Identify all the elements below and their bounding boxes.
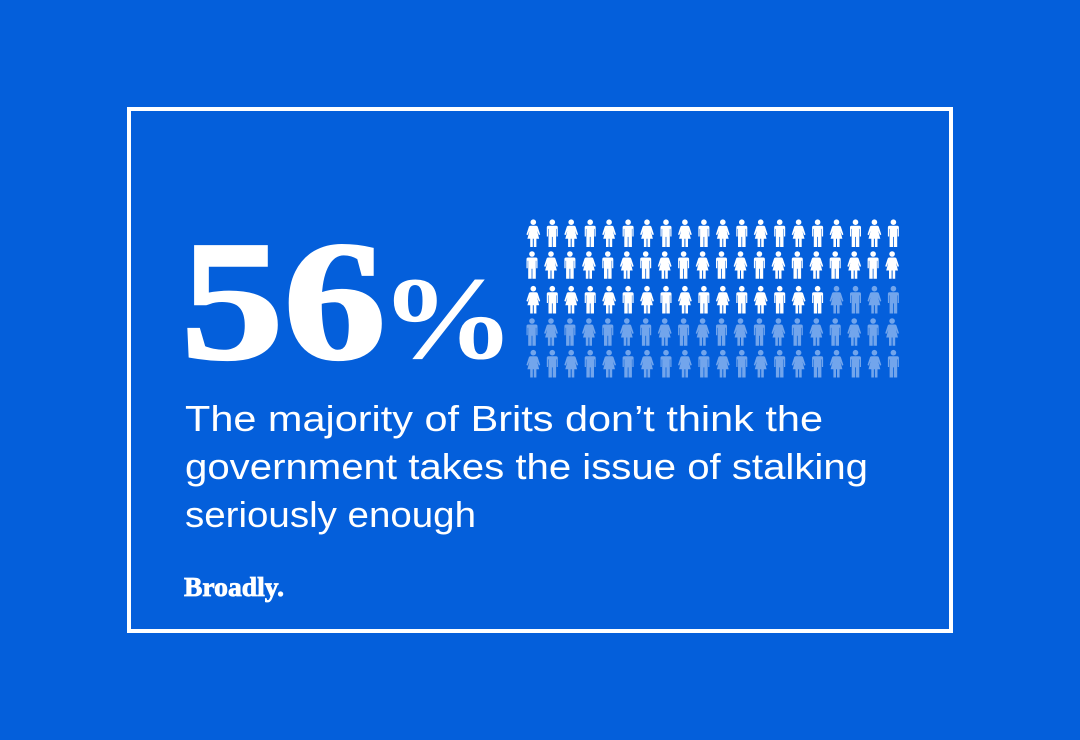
headline figure: 56%: 56 [181,207,386,395]
white frame [129,109,951,631]
pictogram: 56 of 100 people highlighted [526,219,899,378]
statement text: The majority of Brits don’t think the [185,398,823,439]
headline figure: 56% [181,207,515,395]
statement text [185,398,868,535]
statement text: government takes the issue of stalking [185,446,868,487]
row 2: 20 white figures [526,251,899,279]
row 4: 20 pale figures [526,318,899,346]
logo: Broadly: Broadly. [184,572,284,602]
row 1: 20 white figures [526,219,899,247]
row 5: 20 pale figures [526,350,899,378]
statement text: seriously enough [185,494,476,535]
row 3: 16 white figures and 4 pale figures [526,286,899,314]
headline figure: 56%: % [380,253,515,384]
